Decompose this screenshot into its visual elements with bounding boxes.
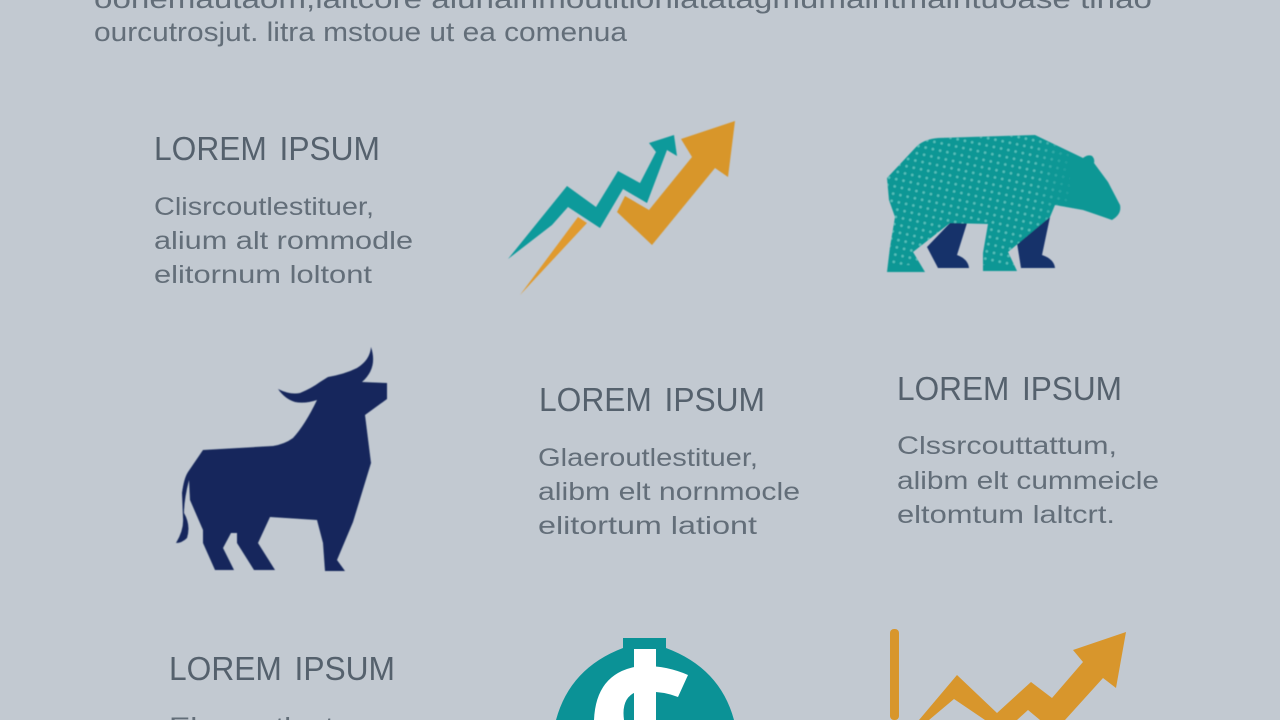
body text [154,193,413,289]
body text: Clisrcoutlestituer, [154,193,374,221]
body text: eltomtum laltcrt. [897,501,1115,529]
body text: alium alt rommodle [154,227,413,255]
body text: alibm elt nornmocle [538,478,800,506]
heading: LOREM IPSUM [897,370,1122,407]
icon: orange line chart with arrow [890,629,1126,720]
body text: elitornum loltont [154,261,372,289]
panel: centre text [538,381,800,540]
icon: rising teal and orange arrows [508,121,735,295]
body text [897,432,1159,529]
heading: LOREM IPSUM [169,650,395,687]
body text [538,444,800,540]
panel: bottom-left text [169,650,395,720]
body text: Glaeroutlestituer, [538,444,758,472]
body text: alibm elt cummeicle [897,467,1159,495]
icon: money bag with dollar sign [556,638,734,720]
panel: right text [897,370,1159,529]
intro text block [94,0,1152,47]
body text: elitortum lationt [538,512,757,540]
heading: LOREM IPSUM [154,130,380,167]
body text: Clssrcouttattum, [897,432,1117,460]
heading: LOREM IPSUM [539,381,765,418]
intro text block: ourcutrosjut. litra mstoue ut ea comenua [94,17,628,47]
icon: navy bull [176,347,387,571]
panel: top-left text [154,130,413,289]
icon: dotted teal bear [880,130,1120,272]
